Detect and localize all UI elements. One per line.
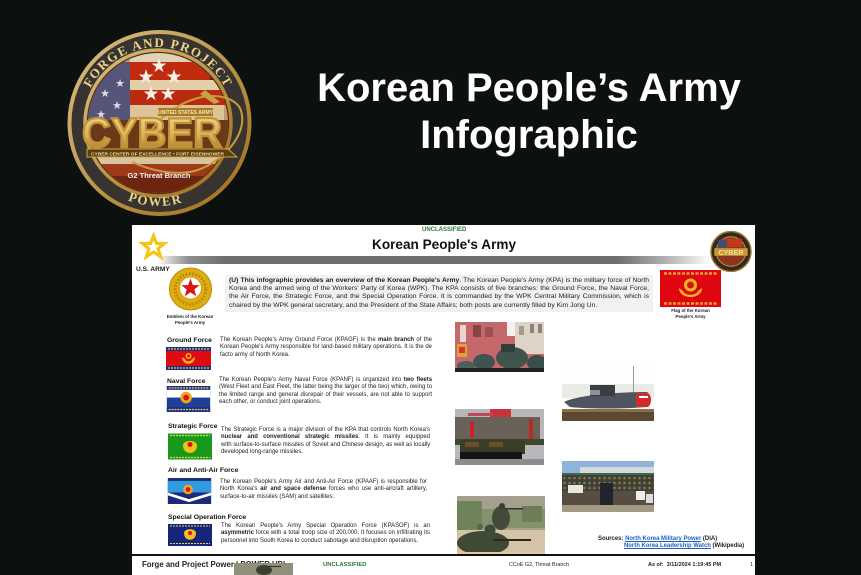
- text: Ground Force: [220, 336, 432, 358]
- section: Naval Force: [166, 376, 432, 412]
- section: Special Operation Force: [168, 514, 430, 546]
- heading: Ground Force: Ground Force: [167, 337, 212, 344]
- text: Naval Force: The Korean People's Army Naval Force (KPANF) is organized into two fleets: [219, 377, 432, 383]
- header gradient bar: [132, 256, 755, 264]
- flag: Air and Anti-Air Force: [168, 478, 212, 504]
- footer: date: As of: 3/11/2024 1:19:45 PM: [648, 562, 721, 568]
- intro text box: [225, 275, 653, 312]
- photo: missile launcher: [455, 409, 544, 465]
- photo: tanks on parade: [455, 322, 544, 372]
- heading: Special Operation Force: Special Operation Force: [168, 514, 246, 521]
- intro text box: chaired by the WPK general secretary, and the President of the State Affairs; both posts are currently filled by Kim Jong Un.: [229, 302, 597, 309]
- text: Naval Force: the limited range and general disrepair of their vessels, are not able to support: [219, 392, 432, 398]
- emblem: Forge and Project Power cyber coin: G2 Threat Branch: [128, 171, 191, 180]
- flag: Special Operation Force: [168, 524, 212, 546]
- emblem: Forge and Project Power cyber coin: ★: [115, 77, 125, 90]
- heading: Naval Force: Naval Force: [167, 378, 206, 385]
- text: Air and Anti-Air Force: North Korea's air and space defense forces who use anti-aircraft artillery,: [220, 486, 427, 492]
- footer rule: [132, 554, 755, 556]
- heading: Strategic Force: Strategic Force: [168, 423, 217, 430]
- intro text box: Korea and the armed wing of the Workers' Party of Korea (WPK). The KPA consists of five branches: the Ground Force, the Naval Force,: [229, 285, 649, 292]
- photo: submarine: [562, 366, 654, 421]
- emblem: Forge and Project Power cyber coin: ★: [165, 66, 183, 88]
- text: Air and Anti-Air Force: surface-to-air missiles (SAM) and satellites.: [220, 494, 334, 500]
- title: Korean People’s Army: [317, 66, 741, 110]
- footer: page number: 1: [750, 562, 753, 568]
- flag of the Korean People's Army: [660, 270, 721, 307]
- emblem: Forge and Project Power cyber coin: ★: [142, 83, 160, 105]
- emblem: Forge and Project Power cyber coin: POWER: [128, 192, 182, 206]
- text: Strategic Force: [221, 426, 430, 455]
- emblem: Forge and Project Power cyber coin: ★: [159, 83, 177, 105]
- section: Ground Force: [166, 336, 432, 370]
- emblem: Forge and Project Power cyber coin: ★: [150, 55, 168, 77]
- intro text box: the Air Force, the Strategic Force, and the Special Operation Force. It is commanded by the WPK Central Military Commission, which is: [229, 293, 649, 300]
- emblem: Forge and Project Power cyber coin: ★: [112, 99, 122, 112]
- text: Strategic Force: with surface-to-surface missiles of Soviet and Chinese design, as well as locally: [221, 442, 430, 448]
- section: Strategic Force: [168, 423, 430, 460]
- footer: [142, 560, 753, 575]
- icon: U.S. Army star: [138, 232, 169, 260]
- title: Infographic: [420, 113, 638, 157]
- text: Ground Force: Korean People's Army responsible for land-based military operations. It is the de: [220, 344, 432, 350]
- text: Special Operation Force: The Korean People's Army Special Operation Force (KPASOF) is an: [221, 523, 430, 529]
- panel: slide: [132, 225, 755, 575]
- text: Naval Force: [219, 376, 432, 405]
- text: Strategic Force: nuclear and conventional strategic missiles. It is mainly equipped: [221, 434, 430, 440]
- text: Special Operation Force: [221, 522, 430, 544]
- emblem: Forge and Project Power cyber coin: CYBER CENTER OF EXCELLENCE • FORT EISENHOWER: [91, 152, 225, 158]
- emblem caption: [167, 314, 214, 325]
- flag: Strategic Force: [168, 434, 212, 460]
- footer: Forge and Project Power: Forge and Project Power | POWER UP!: [142, 560, 285, 569]
- section: Air and Anti-Air Force: [168, 467, 427, 504]
- emblem: Forge and Project Power cyber coin: ★: [100, 87, 110, 100]
- footer: branch: CCoE G2, Threat Branch: [509, 562, 569, 568]
- flag caption: People's Army: [675, 314, 706, 319]
- sources: [598, 536, 744, 549]
- photo: Kim Jong Un with troops: [562, 461, 654, 512]
- text: Strategic Force: developed long-range missiles.: [221, 449, 303, 455]
- classification marking bottom: UNCLASSIFIED: [323, 562, 367, 568]
- text: Naval Force: (West Fleet and East Fleet, the latter being the larger of the two) which, owing to: [219, 384, 432, 390]
- emblem: Forge and Project Power cyber coin: ★: [137, 66, 155, 88]
- photo: soldiers aiming rifles: [457, 496, 545, 554]
- flag caption: Flag of the Korean: [671, 308, 710, 313]
- text: Ground Force: facto army of North Korea.: [220, 352, 290, 358]
- emblem: Forge and Project Power cyber coin: FORGE AND PROJECT: [83, 38, 232, 88]
- icon: coin small: CYBER: [719, 249, 744, 257]
- flag caption: [671, 308, 710, 319]
- emblem caption: People's Army: [175, 320, 205, 324]
- heading: Air and Anti-Air Force: Air and Anti-Air Force: [168, 467, 238, 474]
- emblem: Forge and Project Power cyber coin: CYBER: [82, 109, 222, 156]
- classification marking top: UNCLASSIFIED: [422, 227, 466, 233]
- slide heading: Korean People's Army: [372, 237, 516, 252]
- text: Ground Force: The Korean People's Army Ground Force (KPAGF) is the main branch of the: [220, 337, 432, 343]
- sources: Sources: North Korea Military Power (DIA): [598, 536, 717, 542]
- intro text box: (U) This infographic provides an overview of the Korean People's Army. The Korean People's Army (KPA) is the military force of North: [229, 277, 649, 284]
- emblem of the Korean People's Army: [169, 268, 212, 310]
- icon: coin small: [710, 231, 752, 272]
- photo overflow in footer: [234, 563, 293, 575]
- emblem: Forge and Project Power cyber coin: ★: [96, 108, 106, 121]
- flag: Naval Force: [166, 386, 210, 412]
- text: Naval Force: each other, or conduct joint operations.: [219, 399, 321, 405]
- text: Air and Anti-Air Force: [220, 478, 427, 500]
- emblem caption: Emblem of the Korean: [167, 314, 213, 318]
- text: Special Operation Force: personnel into South Korea to conduct sabotage and disruption operations.: [221, 538, 418, 544]
- emblem: Forge and Project Power cyber coin: UNITED STATES ARMY: [158, 110, 214, 116]
- sources: North Korea Leadership Watch (Wikipedia): [624, 543, 744, 549]
- text: Strategic Force: The Strategic Force is a major division of the KPA that controls North Korea's: [221, 427, 430, 433]
- U.S. Army label: U.S. ARMY: [136, 266, 170, 273]
- title: [317, 66, 741, 157]
- emblem: Forge and Project Power cyber coin: [68, 30, 252, 216]
- text: Special Operation Force: asymmetric force with a total troop size of 200,000. It focuses on infiltrating its: [221, 530, 430, 536]
- text: Air and Anti-Air Force: The Korean People's Army Air and Anti-Air Force (KPAAF) is responsible for: [220, 479, 427, 485]
- flag: Ground Force: [166, 347, 211, 370]
